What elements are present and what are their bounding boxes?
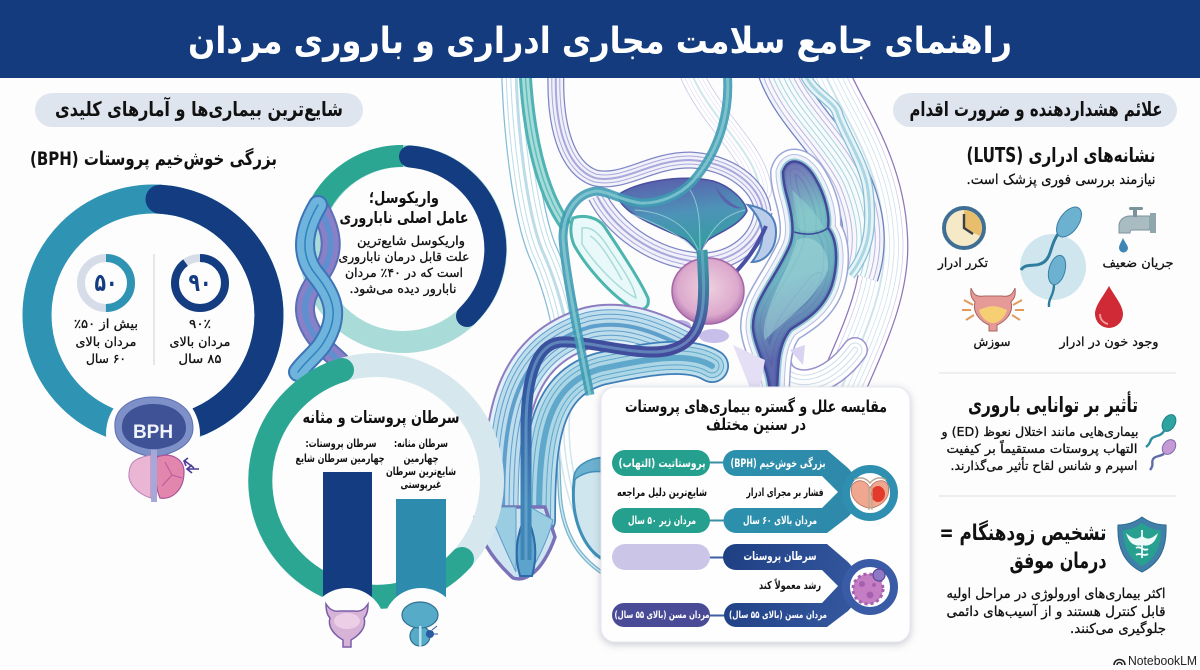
bladder [618, 178, 747, 257]
lower bowel loop [778, 285, 855, 382]
divider [154, 254, 155, 365]
icon: blood drop [1095, 286, 1123, 328]
bladder cancer label: چهارمین [404, 452, 438, 465]
varicocele body text [338, 233, 470, 297]
bladder cancer label [386, 437, 456, 491]
prostatitis column: شایع‌ترین دلیل مراجعه [617, 486, 707, 499]
prostatitis column: مردان زیر ۵۰ سال [628, 514, 696, 527]
early diagnosis body: اکثر بیماری‌های اورولوژی در مراحل اولیه [946, 586, 1166, 602]
stat text 50 percent: بیش از ۵۰٪ [74, 316, 138, 332]
icon: bladder [326, 604, 368, 647]
prostate cancer label [296, 437, 384, 465]
right outer body band [822, 66, 884, 396]
connectors [708, 462, 726, 616]
icon: BPH prostate: BPH [133, 422, 173, 443]
peritoneum band [556, 70, 763, 262]
LUTS subheading: نیازمند بررسی فوری پزشک است. [966, 172, 1156, 188]
stat text 90 percent [170, 316, 230, 366]
icon: BPH prostate [106, 387, 200, 502]
panel: warning signs [893, 93, 1177, 350]
panel: prostate comparison card [601, 387, 910, 642]
left outer bundle [516, 70, 566, 325]
bladder cancer label: شایع‌ترین سرطان [386, 465, 456, 478]
prostatitis column: پروستاتیت (التهاب) [618, 456, 706, 471]
label: burning: سوزش [974, 334, 1010, 350]
card heading: مقایسه علل و گستره بیماری‌های پروستات [625, 396, 887, 417]
prostate cancer column: رشد معمولاً کند [759, 577, 821, 592]
fertility heading: تأثیر بر توانایی باروری [968, 390, 1138, 417]
label: frequent urination: تکرر ادرار [937, 255, 989, 271]
faint upper pelvic lines [690, 70, 760, 190]
prostate cancer label: چهارمین سرطان شایع [296, 452, 384, 465]
varicocele body text: است که در ۴۰٪ مردان [345, 265, 463, 281]
varicocele body text: واریکوسل شایع‌ترین [357, 233, 465, 249]
cancer ring [260, 365, 492, 597]
NotebookLM watermark: NotebookLM [1128, 654, 1197, 668]
prostatitis column [612, 450, 710, 533]
label: weak stream: جریان ضعیف [1102, 255, 1174, 271]
stat text 50 percent: ۶۰ سال [86, 351, 126, 366]
card background [601, 387, 910, 642]
panel: varicocele [298, 156, 496, 372]
fertility body: بیماری‌هایی مانند اختلال نعوظ (ED) و [940, 424, 1138, 440]
anatomical illustration [475, 66, 884, 579]
early diagnosis body: قابل کنترل هستند و از آسیب‌های دائمی [946, 603, 1166, 620]
stat text 50 percent [74, 316, 138, 366]
varicocele body text: نابارور دیده می‌شود. [350, 281, 456, 297]
card heading: در سنین مختلف [706, 415, 806, 435]
fertility body: اسپرم و شانس لقاح تأثیر می‌گذارند. [950, 457, 1138, 474]
corpora [503, 325, 712, 520]
early diagnosis heading: درمان موفق [1010, 549, 1106, 574]
icon: clock [944, 208, 984, 248]
empty column: مردان مسن (بالای ۵۵ سال) [614, 610, 710, 621]
icon: sperm circle [1020, 203, 1087, 307]
donut 50 percent [81, 258, 131, 308]
BPH column: فشار بر مجرای ادرار [746, 486, 824, 499]
early diagnosis body: جلوگیری می‌کنند. [1070, 620, 1166, 637]
vas deferens [563, 70, 728, 395]
icon: twisted veins [298, 205, 345, 372]
icon: cancer cell [846, 563, 894, 611]
panel: fertility impact [940, 390, 1179, 474]
pubic bone [571, 216, 648, 310]
prostate cancer column: سرطان پروستات [744, 549, 816, 564]
icon: prostate with tumour [402, 602, 438, 647]
prostate cancer label: سرطان پروستات: [306, 437, 376, 450]
panel: key diseases and statistics [30, 93, 363, 502]
title: راهنمای جامع سلامت مجاری ادراری و باروری مردان [188, 21, 1012, 62]
section heading pill: شایع‌ترین بیماری‌ها و آمارهای کلیدی [55, 96, 343, 121]
label: blood in urine: وجود خون در ادرار [1058, 334, 1158, 350]
icon: purple sperm [1150, 437, 1179, 470]
BPH column [723, 450, 870, 533]
glans [475, 507, 555, 579]
varicocele ring [310, 156, 496, 342]
early diagnosis heading: تشخیص زودهنگام = [940, 519, 1106, 546]
bar chart [309, 472, 459, 664]
rectum [753, 162, 836, 392]
header band [0, 0, 1200, 78]
donut 90 percent [175, 258, 225, 308]
icon: inflamed prostate [846, 469, 894, 517]
varicocele heading: عامل اصلی ناباروری [340, 208, 468, 227]
cancer heading: سرطان پروستات و مثانه [302, 408, 460, 428]
stat text 90 percent: ۹۰٪ [189, 316, 211, 331]
panel: prostate and bladder cancer [260, 365, 492, 664]
sacrum band [778, 70, 864, 275]
panel: early diagnosis [940, 517, 1166, 637]
varicocele heading: واریکوسل؛ [369, 188, 439, 207]
colon squiggle [803, 70, 870, 275]
BPH ring chart [37, 199, 269, 431]
urethra [526, 250, 704, 560]
varicocele body text: علت قابل درمان ناباروری [338, 249, 470, 265]
card heading [625, 396, 887, 435]
BPH heading: بزرگی خوش‌خیم پروستات (BPH) [30, 147, 277, 170]
icon: medical shield [1118, 517, 1166, 572]
prostate cancer column: مردان مسن (بالای ۵۵ سال) [729, 610, 827, 621]
stat text 90 percent: مردان بالای [170, 334, 230, 350]
icon: burning bladder [962, 288, 1024, 331]
bladder cancer label: سرطان مثانه: [394, 437, 448, 450]
icon: teal sperm [1146, 412, 1179, 447]
varicocele heading [340, 188, 468, 227]
external sphincter [669, 320, 805, 388]
empty column [612, 544, 710, 627]
stat text 90 percent: ۸۵ سال [178, 351, 222, 366]
fertility body [940, 424, 1138, 474]
BPH column: مردان بالای ۶۰ سال [743, 514, 817, 527]
BPH column: بزرگی خوش‌خیم (BPH) [730, 456, 826, 471]
fertility body: التهاب پروستات مستقیماً بر کیفیت [946, 439, 1138, 457]
seminal vesicle [707, 205, 776, 298]
early diagnosis heading [940, 519, 1106, 574]
prostate [672, 258, 744, 324]
icon: faucet [1119, 207, 1156, 252]
bladder cancer label: غیرپوستی [400, 478, 442, 491]
section heading pill [893, 93, 1177, 127]
donut 50 percent: ۵۰ [94, 268, 118, 297]
donut 90 percent: ۹۰ [188, 268, 212, 297]
prostate cancer column [723, 544, 870, 627]
section heading pill [35, 93, 363, 127]
scrotum outline [552, 390, 604, 574]
LUTS heading: نشانه‌های ادراری (LUTS) [967, 143, 1156, 167]
early diagnosis body [946, 586, 1166, 637]
stat text 50 percent: مردان بالای [76, 334, 136, 350]
